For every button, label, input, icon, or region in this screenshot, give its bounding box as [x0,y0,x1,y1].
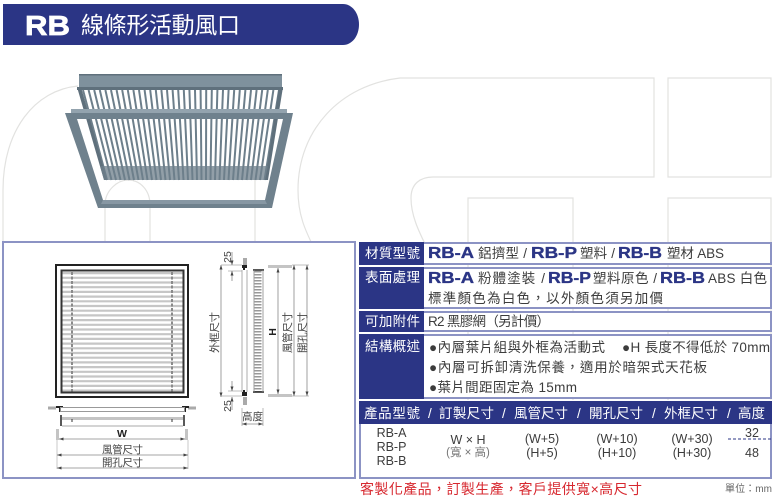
duct size column: (H+5) [526,446,558,460]
outer frame dimension: 25 [222,251,234,263]
row: surface finish: 表面處理 [365,270,420,285]
table header: / [652,406,656,421]
row: surface finish: 標準顏色為白色，以外顏色須另加價 [428,290,664,306]
row: surface finish: ABS 白色 [708,270,767,286]
duct size column: (W+5) [525,432,559,446]
row: surface finish: 粉體塗裝 / [478,270,545,286]
table header: 產品型號 [364,405,420,421]
height column [728,426,771,460]
row: material [359,242,771,265]
table header [359,401,772,424]
row: construction notes: ●內層葉片組與外框為活動式 [429,340,606,355]
table header: 風管尺寸 [514,405,568,421]
width dimension [56,428,188,469]
custom-order note: 客製化產品，訂製生產，客戶提供寬×高尺寸 [360,481,642,497]
width dimension: W [117,428,127,440]
table header: / [502,406,506,421]
opening size column [596,432,638,460]
unit note: 單位：mm [725,482,772,495]
custom size column: W × H [450,433,486,447]
width dimension: 風管尺寸 [102,443,143,456]
title name: 線條形活動風口 [81,12,240,38]
row: material: 材質型號 [365,246,420,261]
row: material: RB-P [531,245,577,262]
height dimension: 開孔尺寸 [296,312,309,353]
outer frame column: (W+30) [671,432,713,446]
blades [83,90,279,180]
row: accessories [359,311,771,332]
table header: 外框尺寸 [664,406,718,421]
model column: RB-A [377,426,407,440]
row: accessories: 可加附件 [365,314,420,329]
specification table [359,401,772,478]
table header: 高度 [738,405,765,421]
custom size column: (寬 × 高) [446,445,490,459]
rear flange [79,74,282,87]
row: material: 鋁擠型 / [478,246,527,261]
row: surface finish: RB-P [548,270,591,287]
blade side rails and lower band [77,87,107,180]
outer frame dimension: 外框尺寸 [208,312,221,353]
row: construction notes: 結構概述 [365,339,420,354]
title model code: RB [25,10,70,41]
row: material: 塑料 / [580,245,615,261]
row: construction notes: ●內層可拆卸清洗保養，適用於暗架式天花板 [429,359,708,375]
table header: 開孔尺寸 [589,406,643,421]
outer frame dimension [208,251,242,412]
row: surface finish: RB-B [660,270,705,287]
height dimension: 風管尺寸 [281,312,294,353]
opening size column: (W+10) [596,432,638,446]
outer frame dimension: 25 [222,400,234,412]
custom size column [446,433,490,459]
opening size column: (H+10) [598,446,636,460]
table header: / [577,406,581,421]
model column: RB-P [377,440,406,454]
row: material: RB-A [428,245,475,262]
row: construction notes [359,334,771,399]
row: construction notes: ●H 長度不得低於 70mm [622,339,770,355]
front frame flange [71,109,287,113]
height column: 32 [745,426,759,440]
panel: dimension drawings [3,242,355,478]
table header: / [727,406,731,421]
height dimension [267,265,309,397]
row: surface finish: RB-A [428,270,475,287]
width dimension: 開孔尺寸 [102,456,143,469]
product illustration: 3D linear grille [65,74,293,208]
model column [377,426,407,468]
table header: / [428,406,432,421]
height dimension: H [267,328,279,336]
model column: RB-B [377,454,406,468]
row: accessories: R2 黑膠網（另計價） [428,314,550,329]
row: construction notes: ●葉片間距固定為 15mm [429,380,577,395]
row: surface finish [359,267,771,309]
row: material: 塑材 ABS [667,245,724,261]
height column: 48 [745,446,759,460]
row: material: RB-B [618,245,662,262]
table header: 訂製尺寸 [439,406,494,421]
depth dimension: 高度 [242,410,264,423]
title bar [3,4,359,45]
background line pattern [3,78,771,400]
row: surface finish: 塑料原色 / [593,270,657,286]
side section view [242,258,264,405]
outer frame column [671,432,713,460]
front frame [65,113,293,208]
duct size column [525,432,559,460]
depth dimension [242,408,264,426]
bottom section view [48,406,196,426]
outer frame column: (H+30) [673,446,711,460]
front view of grille [56,265,188,397]
